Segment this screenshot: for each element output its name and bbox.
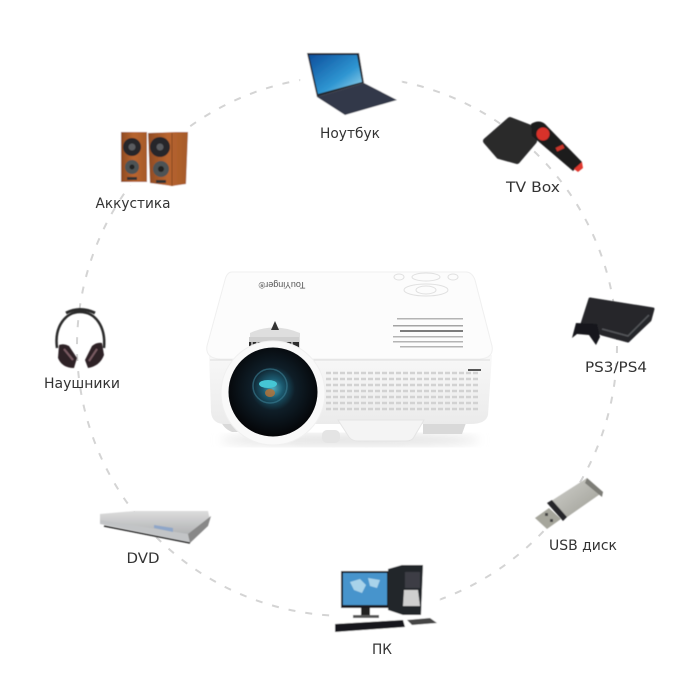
speakers icon [119, 128, 190, 186]
remote [531, 122, 582, 171]
headphones icon [57, 310, 104, 368]
adjuster knob [322, 430, 340, 443]
game console icon [572, 299, 653, 345]
USB drive icon [535, 478, 603, 529]
projector base shadow strips [220, 418, 466, 434]
spec text on lid [393, 318, 463, 348]
projector top cover [207, 272, 492, 359]
brand on lid: TouYinger® [258, 280, 305, 290]
DVD player icon [100, 511, 211, 543]
dashed connection circle [77, 76, 617, 616]
projector front body [209, 355, 492, 424]
label: laptop: Ноутбук [320, 126, 380, 142]
lens [221, 341, 325, 445]
projector foot [338, 420, 424, 441]
PC icon [332, 562, 440, 634]
label: TV Box: TV Box [505, 180, 560, 196]
focus ring [249, 321, 300, 355]
label: USB drive: USB диск [549, 538, 617, 554]
label: DVD: DVD [126, 551, 160, 567]
indicator light [468, 369, 481, 371]
label: headphones: Наушники [44, 376, 120, 392]
laptop icon [300, 48, 402, 120]
label: PC: ПК [372, 642, 393, 658]
projector [207, 272, 492, 446]
label: console: PS3/PS4 [585, 360, 647, 376]
TV box icon [486, 120, 583, 172]
ventilation grille [326, 373, 478, 409]
control buttons [394, 273, 458, 296]
label: speakers: Аккустика [96, 196, 170, 212]
